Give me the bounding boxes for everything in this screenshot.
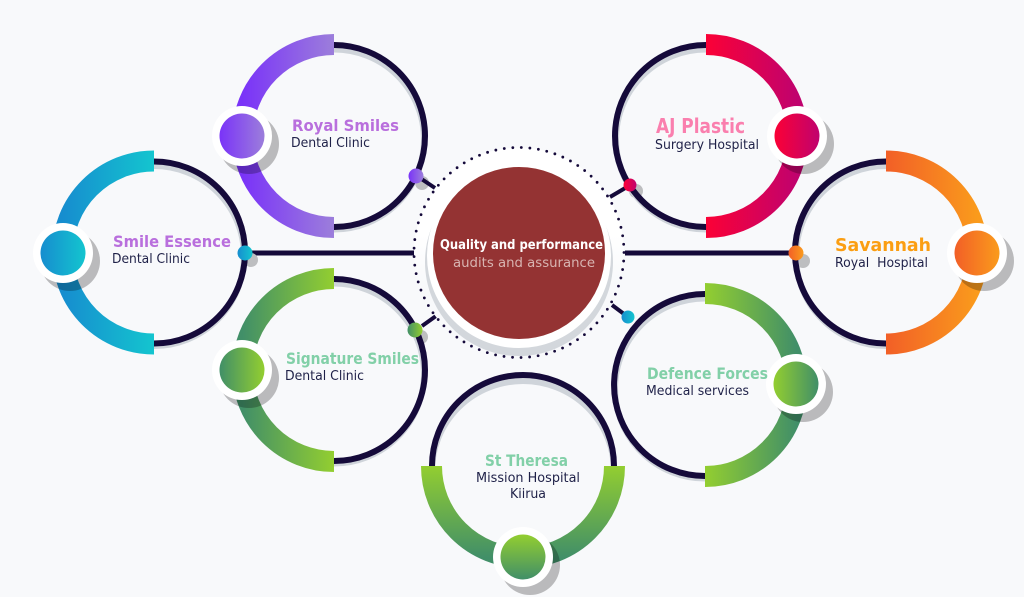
connector dot: Signature Smiles — [408, 322, 422, 338]
heading: Savannah: Savannah — [835, 235, 931, 256]
heading: Quality and performance: Quality and performance — [440, 238, 603, 253]
panel: AJ Plastic — [610, 44, 834, 230]
heading: Royal Smiles: Royal Smiles — [292, 116, 399, 135]
panel: central hub — [414, 148, 624, 358]
icon: Savannah knob — [954, 230, 1000, 276]
panel: Signature Smiles — [212, 278, 436, 464]
connector dot: Savannah — [788, 246, 804, 260]
icon: AJ Plastic knob — [774, 114, 820, 158]
connector: horizontal left line — [245, 250, 415, 256]
connector dot: Smile Essence — [238, 246, 252, 260]
text: Royal Hospital: Royal Hospital — [835, 255, 928, 271]
panel: Royal Smiles — [212, 44, 435, 230]
text: Kiirua: Kiirua — [510, 486, 546, 502]
heading: St Theresa: St Theresa — [485, 451, 568, 470]
icon: Royal Smiles knob — [220, 114, 264, 158]
panel: Savannah — [788, 161, 1014, 346]
heading: Defence Forces: Defence Forces — [647, 364, 768, 383]
icon: St Theresa knob — [500, 534, 546, 580]
text: Mission Hospital: Mission Hospital — [476, 470, 580, 486]
panel: Smile Essence — [33, 161, 258, 346]
text: Dental Clinic: Dental Clinic — [291, 135, 370, 151]
panel: Defence Forces — [612, 294, 833, 478]
icon: Signature Smiles knob — [220, 348, 264, 392]
heading: Smile Essence: Smile Essence — [113, 232, 231, 251]
connector dot: Royal Smiles — [408, 168, 424, 184]
heading: Signature Smiles: Signature Smiles — [286, 349, 419, 368]
connector dot: Defence Forces — [622, 310, 634, 324]
text: Dental Clinic: Dental Clinic — [285, 368, 364, 384]
connector dot: AJ Plastic — [624, 178, 636, 192]
text: Surgery Hospital: Surgery Hospital — [655, 137, 759, 153]
heading: AJ Plastic: AJ Plastic — [656, 114, 745, 138]
panel: St Theresa — [432, 375, 614, 595]
icon: Defence Forces knob — [774, 362, 818, 406]
text: Medical services: Medical services — [646, 383, 749, 399]
icon: Smile Essence knob — [40, 230, 86, 276]
connector: horizontal right line — [625, 250, 796, 256]
text: Dental Clinic: Dental Clinic — [112, 251, 190, 267]
text: audits and assurance: audits and assurance — [453, 256, 595, 271]
